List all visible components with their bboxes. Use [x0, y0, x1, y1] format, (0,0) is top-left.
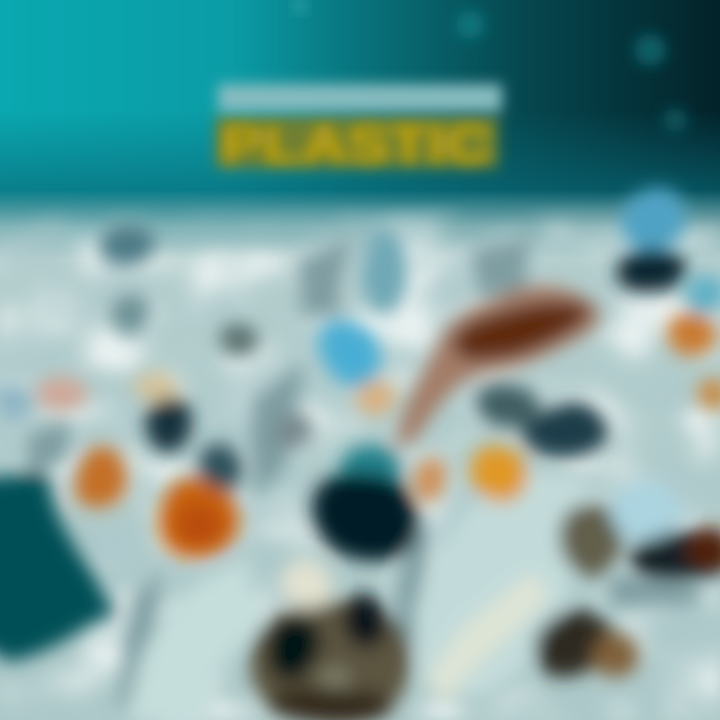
title panel: blurred headline: [216, 84, 502, 174]
bottle: large white plastic bottle, lower centre right: [417, 470, 590, 700]
debris: orange ball: [158, 480, 238, 560]
debris: small orange ball: [72, 452, 122, 508]
title: PLASTIC: PLASTIC: [221, 116, 491, 174]
debris: orange caps, centre: [353, 375, 527, 503]
debris: blue plastic piece: [317, 317, 377, 383]
seabed streaks: grey-blue shadows between plastic items: [25, 240, 700, 710]
debris: dark brown mass, right: [532, 483, 720, 679]
animal: brown feather-like fin: [395, 289, 603, 445]
seabed: mass of white plastic waste: [0, 190, 720, 720]
bottle: white plastic bottle, lower left: [130, 560, 262, 720]
title backing: olive band behind the headline: [216, 116, 498, 168]
debris: orange pieces, right edge: [668, 314, 720, 416]
debris: dark teal plastic sheet, left: [0, 465, 112, 660]
debris: blue bottle, top right: [623, 186, 720, 315]
animal: turtle head with dark eyes: [250, 563, 410, 720]
debris: dark navy object, centre: [311, 440, 415, 561]
debris: small dark fragments: [0, 219, 609, 488]
upper title line: illegible pale band: [218, 84, 502, 112]
debris and animals: soft distorted layer: [0, 186, 720, 720]
